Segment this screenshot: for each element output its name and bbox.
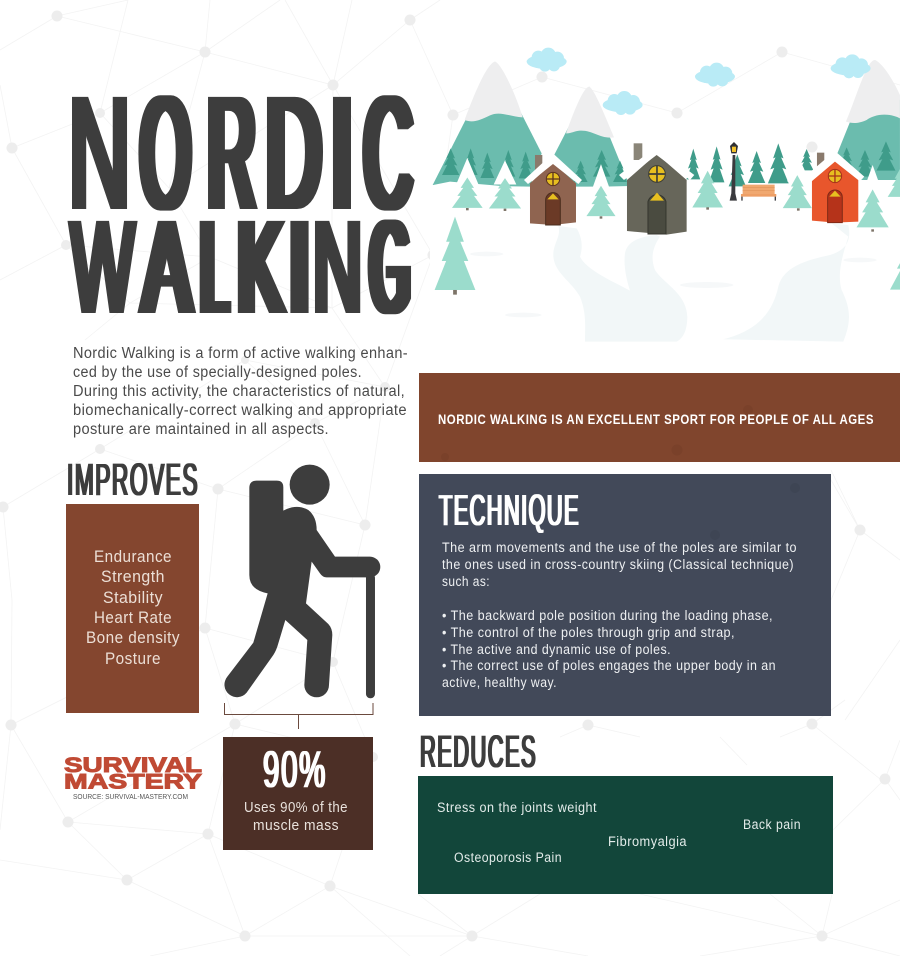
title: W <box>71 193 134 340</box>
clouds <box>527 48 871 115</box>
stat: 90 percent: Uses 90% of the <box>244 800 348 816</box>
title: N <box>313 193 362 340</box>
street lamp <box>730 142 738 201</box>
panel: technique: • The active and dynamic use of poles. <box>442 642 671 657</box>
title: L <box>201 193 228 340</box>
panel: improves: Posture <box>105 650 161 668</box>
title: A <box>143 193 191 340</box>
dark pine trees <box>442 141 895 186</box>
intro text: During this activity, the characteristics of natural, <box>73 383 405 400</box>
icon: hiker with pole <box>224 465 380 698</box>
banner <box>419 373 900 462</box>
stat: 90 percent: 90% <box>263 741 327 799</box>
logo: survival mastery: MASTERY <box>64 770 202 794</box>
panel: improves: Endurance <box>94 548 172 566</box>
panel: technique: • The control of the poles through grip and strap, <box>442 625 735 640</box>
title: K <box>238 193 283 340</box>
intro text: ced by the use of specially-designed poles. <box>73 364 362 381</box>
intro text: posture are maintained in all aspects. <box>73 421 329 438</box>
bench <box>741 185 776 201</box>
title: D <box>266 63 321 242</box>
intro text: biomechanically-correct walking and appropriate <box>73 402 407 419</box>
improves heading: IMPROVES <box>67 454 199 505</box>
pale snowy trees <box>435 156 900 295</box>
logo: survival mastery: SOURCE: SURVIVAL-MASTERY.COM <box>73 792 188 801</box>
logo: survival mastery <box>64 754 202 801</box>
panel: reduces: Stress on the joints weight <box>437 800 597 815</box>
panel: technique: • The correct use of poles engages the upper body in an <box>442 658 776 673</box>
title: N <box>68 63 130 242</box>
panel: improves: Heart Rate <box>94 609 172 627</box>
stat: 90 percent <box>223 737 373 850</box>
panel: technique: such as: <box>442 574 490 589</box>
panel: reduces: Osteoporosis Pain <box>454 850 562 865</box>
title <box>68 63 412 340</box>
bracket <box>224 703 373 729</box>
panel: technique: • The backward pole position during the loading phase, <box>442 608 773 623</box>
panel: technique: the ones used in cross-country skiing (Classical technique) <box>442 557 794 572</box>
panel: technique: active, healthy way. <box>442 675 557 690</box>
title: R <box>208 63 255 242</box>
winter village illustration <box>430 48 900 342</box>
mountains <box>433 60 900 187</box>
grey house <box>619 143 694 235</box>
panel: reduces: Fibromyalgia <box>608 834 687 849</box>
panel: improves: Bone density <box>86 629 180 647</box>
intro text: Nordic Walking is a form of active walking enhan- <box>73 345 408 362</box>
title: O <box>141 63 190 242</box>
panel: improves <box>66 504 199 713</box>
logo: survival mastery: SURVIVAL <box>64 754 202 777</box>
stat: 90 percent: muscle mass <box>253 818 339 834</box>
panel: reduces <box>418 776 833 894</box>
panel: technique: TECHNIQUE <box>439 486 580 535</box>
panel: technique: The arm movements and the use of the poles are similar to <box>442 540 797 555</box>
title: I <box>332 63 352 242</box>
text: C <box>364 63 412 242</box>
panel: improves: Strength <box>101 568 165 586</box>
panel: improves: Stability <box>103 589 163 607</box>
brown house <box>524 153 582 225</box>
orange house <box>807 151 864 223</box>
snow ground <box>430 182 900 342</box>
text: G <box>370 193 409 340</box>
text: REDUCES <box>420 726 537 777</box>
panel: reduces: Back pain <box>743 817 801 832</box>
title: I <box>289 193 310 340</box>
intro text <box>73 345 408 438</box>
snow road <box>553 226 687 342</box>
panel: technique <box>419 474 831 716</box>
